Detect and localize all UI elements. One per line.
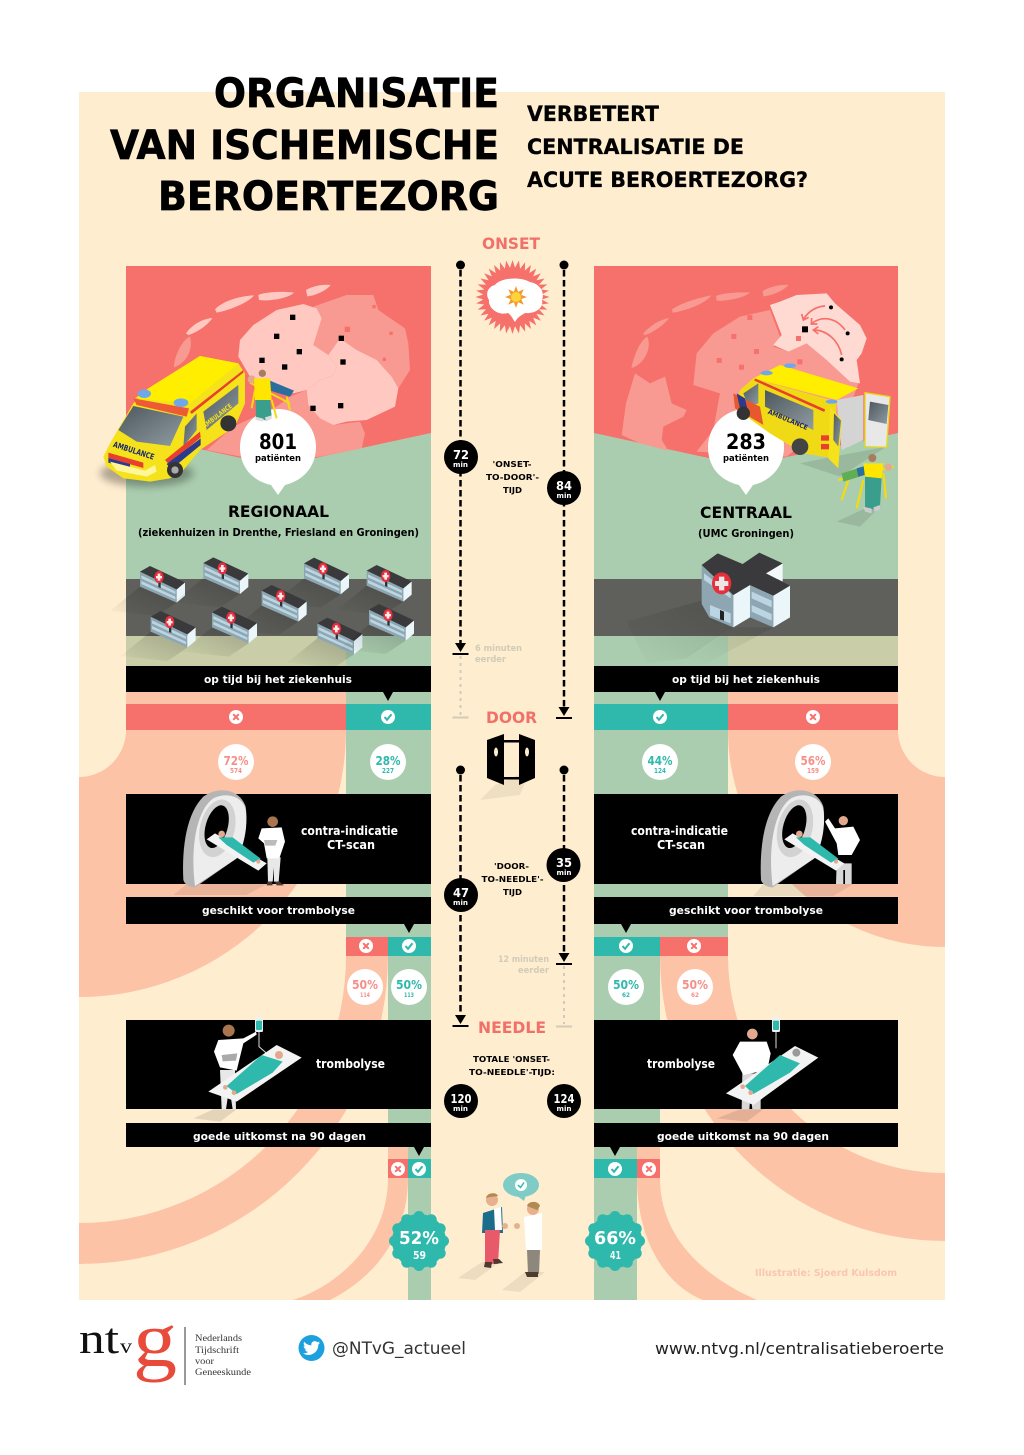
stat: 56%: 56% [800, 754, 826, 768]
stat: 44%: 124 [654, 767, 666, 775]
panel: trombolyse (left) [126, 1020, 431, 1109]
note: 12 minuten eerder: eerder [518, 966, 550, 976]
outcome bar: right yes/no 2 [594, 937, 728, 956]
icon: yellow ambulance, front view (regional): AMBULANCE [112, 440, 155, 462]
panel: contra-indicatie CT-scan (left): contra-indicatie [301, 824, 398, 838]
subtitle: VERBETERT [527, 102, 660, 126]
stat: 50% 113: 50% [396, 978, 422, 992]
stat: 72%: 72% [224, 754, 248, 768]
label: onset-to-door-tijd: TO-DOOR'- [486, 473, 539, 482]
logo: ntvg: nt [79, 1316, 119, 1363]
label: totale onset-to-needle-tijd: TOTALE 'ONSET- [473, 1055, 550, 1064]
timeline label: ONSET: ONSET [482, 234, 540, 253]
heading: regionaal: REGIONAAL [228, 502, 329, 521]
bar: geschikt voor trombolyse (left) [126, 897, 431, 933]
time: 72 min: min [453, 461, 468, 469]
outcome bar: right yes/no [594, 704, 898, 730]
stat: 56% [795, 744, 831, 780]
bar: op tijd bij het ziekenhuis (right) [594, 666, 898, 701]
badge: 52% 59: 59 [413, 1249, 426, 1262]
title [110, 71, 499, 220]
timeline: door-to-needle right [556, 766, 572, 1028]
time: 84 min: min [556, 492, 572, 500]
timeline: onset-to-door left [452, 260, 468, 718]
icon: central hospital [627, 553, 790, 663]
timeline: onset-to-door right [556, 260, 572, 719]
note: 6 minuten eerder: 6 minuten [475, 644, 522, 654]
panel: contra-indicatie CT-scan (right): contra-indicatie [631, 824, 728, 838]
bar: op tijd bij het ziekenhuis (right): op tijd bij het ziekenhuis [672, 673, 820, 686]
bar: goede uitkomst na 90 dagen (right): goede uitkomst na 90 dagen [657, 1130, 829, 1143]
note: 6 minuten eerder [475, 644, 522, 665]
stat: 44%: 44% [648, 754, 672, 768]
badge: 66% 41 [585, 1211, 645, 1271]
subtitle: ACUTE BEROERTEZORG? [527, 168, 808, 192]
stat: 50% 62 pink [677, 969, 713, 1005]
stat: 50% 114: 50% [352, 978, 378, 992]
icon: nine regional hospitals [110, 557, 414, 668]
icon: CT scanner with doctor (right) [753, 790, 860, 896]
stat: 50% 113 [391, 969, 427, 1005]
credit: Illustratie: Sjoerd Kulsdom [755, 1268, 897, 1279]
icon: open doors [480, 734, 535, 800]
panel: trombolyse (right) [594, 1020, 898, 1109]
stat: 50% 62 pink: 62 [691, 991, 699, 999]
bar: goede uitkomst na 90 dagen (right) [594, 1123, 898, 1156]
panel: contra-indicatie CT-scan (left) [126, 794, 431, 884]
flow band: right peach arc 1 [728, 692, 945, 947]
stat: 50% 62 pink: 50% [682, 978, 708, 992]
label: onset-to-door-tijd: 'ONSET- [492, 460, 532, 469]
label: onset-to-door-tijd [486, 460, 539, 495]
time: 35 min [546, 848, 580, 882]
stat: 50% 62 teal: 62 [622, 991, 630, 999]
bar: goede uitkomst na 90 dagen (left) [126, 1123, 431, 1156]
stat: 72%: 574 [230, 767, 242, 775]
icon: doctor and patient on bed (right) [717, 1017, 818, 1122]
text: url: www.ntvg.nl/centralisatieberoerte [655, 1339, 944, 1358]
flow band: right green columns [594, 692, 728, 1300]
label: onset-to-door-tijd: TIJD [503, 486, 522, 495]
time: 120 min: min [453, 1105, 468, 1113]
subtitle: CENTRALISATIE DE [527, 135, 744, 159]
callout: 283 patiënten: 283 [726, 430, 766, 454]
icon: twitter bird [298, 1335, 324, 1361]
stat: 72% [218, 744, 254, 780]
heading: centraal: CENTRAAL [700, 503, 792, 522]
time: 84 min: 84 [556, 479, 572, 493]
title: ORGANISATIE [214, 71, 499, 117]
icon: yellow ambulance, front view (regional): AMBULANCE [201, 402, 234, 430]
flow band: left green columns [346, 692, 431, 1300]
stat: 50% 62 teal: 50% [613, 978, 639, 992]
subtitle [527, 102, 808, 192]
panel: contra-indicatie CT-scan (right): CT-scan [657, 838, 705, 852]
icon: paramedic with stretcher (centraal) [837, 454, 893, 527]
logo: ntvg: v [120, 1336, 132, 1358]
bar: geschikt voor trombolyse (right): geschikt voor trombolyse [669, 904, 823, 917]
note: 12 minuten eerder [498, 955, 550, 976]
label: totale onset-to-needle-tijd: TO-NEEDLE'-TIJD: [469, 1068, 555, 1077]
callout: 283 patiënten: patiënten [723, 454, 769, 464]
flow band: right peach arc 3 [637, 1147, 757, 1300]
timeline: door-to-needle left [452, 766, 468, 1027]
stat: 28%: 28% [376, 754, 400, 768]
timeline label: NEEDLE: NEEDLE [478, 1018, 546, 1037]
logo: ntvg: Nederlands [195, 1334, 242, 1344]
bar: geschikt voor trombolyse (right) [594, 897, 898, 933]
heading: regionaal: (ziekenhuizen in Drenthe, Friesland en Groningen) [138, 527, 419, 539]
map: regional hospitals in the north of the Netherlands [174, 285, 410, 462]
title: BEROERTEZORG [158, 174, 499, 220]
note: 6 minuten eerder: eerder [475, 655, 507, 665]
flow band: right peach arc 2 [660, 924, 945, 1241]
time: 72 min [444, 440, 478, 474]
time: 124 min [547, 1084, 581, 1118]
cream background panel [79, 92, 945, 1300]
time: 124 min: min [556, 1105, 572, 1113]
logo: ntvg: g [133, 1296, 177, 1383]
stat: 28% [370, 744, 406, 780]
badge: 52% 59: 52% [399, 1228, 439, 1249]
logo: ntvg [79, 1296, 251, 1385]
stat: 50% 114: 114 [360, 991, 370, 999]
text: twitter handle: @NTvG_actueel [332, 1339, 466, 1359]
callout: 801 patiënten [240, 409, 316, 495]
label: totale onset-to-needle-tijd [469, 1055, 555, 1077]
panel: trombolyse (right): trombolyse [647, 1057, 715, 1071]
flow band: left peach arc 2 [79, 924, 388, 1264]
label: door-to-needle-tijd: TO-NEEDLE'- [482, 875, 544, 884]
heading: centraal: (UMC Groningen) [698, 528, 794, 540]
stat: 50% 113: 113 [404, 991, 414, 999]
map: central hospital in the north of the Netherlands [622, 285, 867, 457]
bar: geschikt voor trombolyse (left): geschikt voor trombolyse [202, 904, 355, 917]
time: 120 min: 120 [450, 1092, 472, 1106]
icon: yellow ambulance, rear open (centraal): AMBULANCE [767, 408, 809, 432]
title: VAN ISCHEMISCHE [110, 123, 499, 169]
icon: yellow ambulance, front view (regional) [100, 356, 245, 487]
stat: 56%: 159 [807, 767, 819, 775]
badge: 52% 59 [389, 1211, 449, 1271]
logo: ntvg: Geneeskunde [195, 1368, 251, 1378]
panel: regionaal scene [126, 266, 431, 666]
time: 35 min: 35 [556, 856, 572, 870]
outcome bar: left no/yes 2 [346, 937, 431, 956]
icon: patient talking with doctor [458, 1173, 545, 1292]
icon: CT scanner with nurse (left) [173, 790, 285, 895]
outcome bar: left no/yes 3 [388, 1159, 431, 1178]
time: 47 min [444, 878, 478, 912]
timeline label: DOOR: DOOR [486, 708, 537, 727]
callout: 801 patiënten: patiënten [255, 454, 301, 464]
logo: ntvg: Tijdschrift [195, 1345, 239, 1356]
heading: centraal [698, 503, 794, 540]
outcome bar: left no/yes [126, 704, 431, 730]
label: door-to-needle-tijd [482, 862, 544, 897]
icon: brain with burst [474, 258, 551, 336]
time: 35 min: min [556, 869, 572, 877]
panel: contra-indicatie CT-scan (right) [594, 794, 898, 884]
panel: trombolyse (left): trombolyse [316, 1057, 385, 1071]
stat: 50% 62 teal [608, 969, 644, 1005]
badge: 66% 41: 66% [594, 1228, 636, 1249]
time: 47 min: min [453, 899, 468, 907]
time: 72 min: 72 [453, 448, 469, 462]
icon: paramedic with stretcher (regional) [248, 370, 294, 422]
logo: ntvg: voor [195, 1357, 215, 1367]
bar: goede uitkomst na 90 dagen (left): goede uitkomst na 90 dagen [193, 1130, 366, 1143]
panel: centraal scene [594, 266, 898, 666]
bar: op tijd bij het ziekenhuis (left) [126, 666, 431, 701]
time: 124 min: 124 [554, 1092, 574, 1106]
callout: 801 patiënten: 801 [259, 430, 297, 454]
time: 84 min [547, 471, 581, 505]
icon: nurse and patient on bed (left) [193, 1017, 302, 1122]
flow band: left peach arc 1 [79, 692, 346, 997]
bar: op tijd bij het ziekenhuis (left): op tijd bij het ziekenhuis [204, 673, 352, 686]
stat: 44% [642, 744, 678, 780]
note: 12 minuten eerder: 12 minuten [498, 955, 549, 965]
time: 120 min [444, 1084, 478, 1118]
badge: 66% 41: 41 [610, 1249, 621, 1262]
time: 47 min: 47 [453, 886, 469, 900]
icon: yellow ambulance, rear open (centraal) [733, 363, 890, 477]
heading: regionaal [138, 502, 419, 539]
stat: 50% 114 [347, 969, 383, 1005]
label: door-to-needle-tijd: 'DOOR- [494, 862, 529, 871]
flow band: left peach arc 3 [293, 1147, 408, 1300]
callout: 283 patiënten [708, 409, 784, 495]
stat: 28%: 227 [382, 767, 394, 775]
panel: contra-indicatie CT-scan (left): CT-scan [327, 838, 375, 852]
label: door-to-needle-tijd: TIJD [503, 888, 522, 897]
outcome bar: right yes/no 3 [594, 1159, 660, 1178]
